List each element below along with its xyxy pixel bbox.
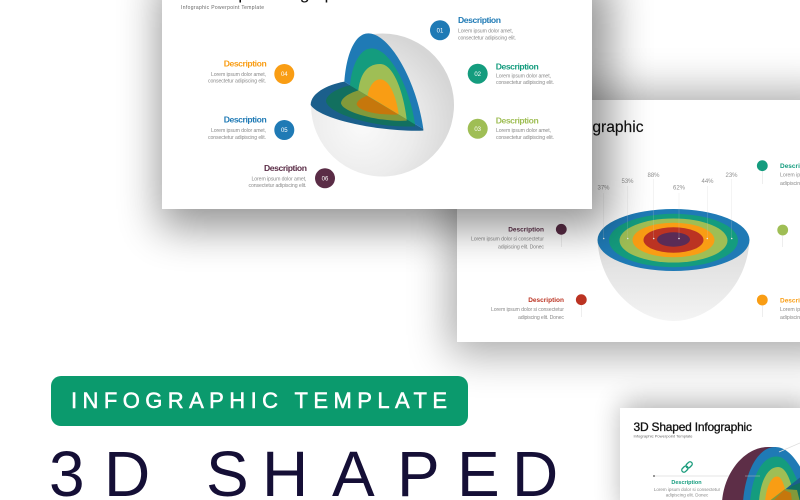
concentric layers	[598, 209, 750, 271]
slide subtitle: Infographic Powerpoint Template	[634, 434, 693, 438]
item 04: Lorem ipsum dolor amet,	[211, 72, 266, 78]
item 04: consectetur adipiscing elit.	[208, 79, 266, 85]
callout: purple	[471, 224, 567, 250]
callout: red: Description	[528, 297, 564, 304]
callout: orange	[757, 295, 800, 321]
item 04: Description	[224, 59, 267, 69]
callout: olive	[777, 225, 788, 235]
item 03: 03	[474, 127, 482, 133]
marker dots	[603, 238, 732, 239]
item 02: 02	[474, 72, 482, 78]
item 03: Description	[496, 116, 539, 126]
item 02: Lorem ipsum dolor amet,	[496, 74, 551, 80]
item 04	[208, 59, 294, 85]
slide title: 3D Shaped Infographic	[484, 119, 644, 136]
percentage labels: 37%	[597, 186, 610, 192]
connector stems	[561, 171, 783, 317]
item 01	[430, 15, 516, 41]
3D cutaway shape	[722, 443, 800, 500]
description: Lorem ipsum dolor si consectetur	[654, 487, 721, 492]
callout: red: Lorem ipsum dolor si consectetur	[491, 307, 564, 313]
item 05: 05	[281, 128, 288, 134]
item 04: 04	[281, 72, 288, 78]
item 02	[468, 61, 554, 86]
timeline line	[653, 475, 760, 477]
description: Description	[671, 480, 702, 486]
item 03: Lorem ipsum dolor amet,	[496, 128, 551, 134]
panel: bottom right slide	[620, 402, 800, 500]
item 01: Description	[458, 15, 501, 25]
panel: right hemisphere slide	[450, 92, 800, 354]
panel: top sphere slide	[160, 0, 610, 228]
item 05	[208, 115, 294, 141]
sphere body	[311, 34, 454, 177]
item 06: Description	[264, 163, 307, 173]
callout: purple: adipiscing elit. Donec	[498, 244, 544, 250]
item 06: 06	[322, 176, 329, 182]
badge: infographic template	[51, 376, 468, 426]
percentage labels: 62%	[673, 186, 686, 192]
item 05: Description	[224, 115, 267, 125]
badge: infographic template: INFOGRAPHIC TEMPLATE	[71, 388, 447, 413]
item 01: 01	[437, 28, 444, 34]
slide title: 3D Shaped Infographic	[634, 420, 752, 434]
callout: red: adipiscing elit. Donec	[518, 315, 564, 321]
percentage labels: 53%	[621, 179, 634, 185]
item 01: consectetur adipiscing elit.	[458, 35, 516, 41]
item 06: Lorem ipsum dolor amet,	[252, 176, 306, 182]
item 05: Lorem ipsum dolor amet,	[211, 128, 266, 134]
icon: link	[681, 461, 693, 473]
item 02: consectetur adipiscing elit.	[496, 80, 554, 86]
item 03	[468, 116, 554, 141]
percentage labels	[597, 173, 738, 192]
callout: purple: Lorem ipsum dolor si consectetur	[471, 236, 544, 242]
description	[654, 480, 721, 498]
item 06: consectetur adipiscing elit.	[248, 183, 306, 189]
callout: purple: Description	[508, 226, 544, 234]
cutaway layers	[311, 33, 423, 131]
percentage markers	[604, 179, 732, 238]
item 03: consectetur adipiscing elit.	[496, 135, 554, 141]
description: adipiscing elit. Donec	[666, 492, 709, 498]
item 01: Lorem ipsum dolor amet,	[458, 28, 513, 34]
percentage labels: 88%	[647, 173, 660, 179]
slide subtitle: Infographic Powerpoint Template	[181, 5, 264, 11]
percentage labels: 44%	[701, 179, 714, 185]
percentage labels: 23%	[725, 173, 738, 179]
callout: teal	[757, 160, 800, 187]
callout: red	[491, 294, 587, 321]
hemisphere body	[598, 240, 750, 321]
item 02: Description	[496, 61, 539, 71]
item 06	[248, 163, 335, 189]
item 05: consectetur adipiscing elit.	[208, 135, 266, 141]
